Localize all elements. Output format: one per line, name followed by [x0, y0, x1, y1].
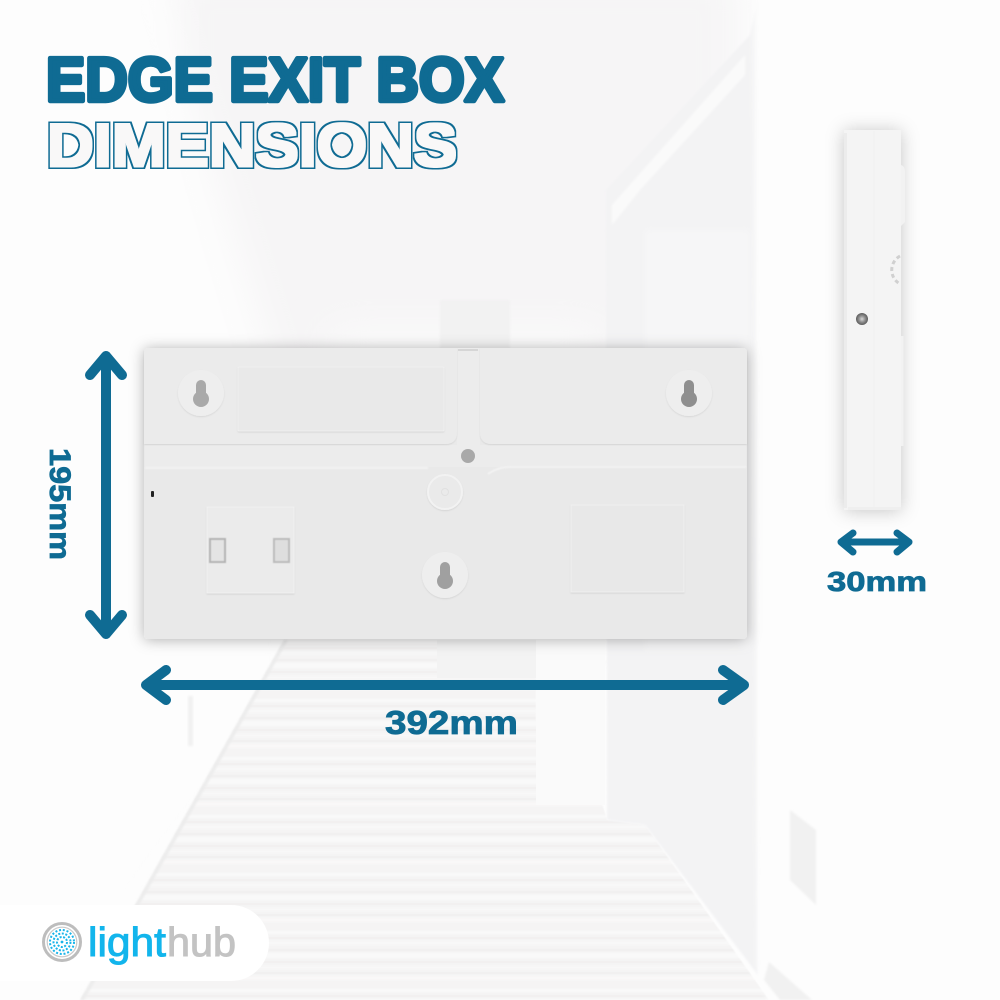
title: [46, 46, 504, 179]
arrow: height: [90, 356, 122, 634]
wordmark: light: [88, 919, 167, 965]
arrow: depth: [841, 533, 909, 552]
raised label panel: [238, 367, 444, 431]
keyhole mount right: [666, 370, 712, 416]
label: 30mm: 30mm: [827, 566, 927, 597]
arrow: width: [146, 670, 744, 700]
screw hole: [461, 449, 475, 463]
wordmark: hub: [167, 919, 236, 965]
heading: DIMENSIONS outlined: DIMENSIONS: [47, 112, 457, 179]
keyhole mount left: [178, 370, 224, 416]
label: 392mm: 392mm: [385, 704, 518, 741]
channel highlight with centre curve: [145, 467, 746, 474]
vertical channel: [457, 348, 480, 453]
upper left panel: [144, 348, 457, 444]
box body: [144, 348, 747, 639]
product: side view of exit box: [844, 130, 905, 510]
keyhole mount centre: [422, 552, 468, 598]
heading: EDGE EXIT BOX: EDGE EXIT BOX: [46, 46, 504, 115]
side bump top: [901, 165, 905, 226]
raised square panel: [571, 505, 684, 592]
screw: [856, 313, 868, 325]
small black mark: [151, 491, 154, 497]
side bump lower: [901, 336, 904, 446]
upper right panel: [480, 348, 747, 444]
connector plate with two holes: [207, 507, 294, 593]
horizontal channel: [145, 445, 746, 467]
side body: [844, 130, 901, 510]
product: rear view of exit box: [144, 348, 747, 639]
dashed knockout: [892, 256, 900, 284]
washer: [428, 475, 462, 509]
logo pill: [0, 905, 269, 981]
label: 195mm: 195mm: [43, 448, 76, 560]
top notch: [458, 349, 478, 351]
icon: lighthub ring: [44, 924, 80, 960]
